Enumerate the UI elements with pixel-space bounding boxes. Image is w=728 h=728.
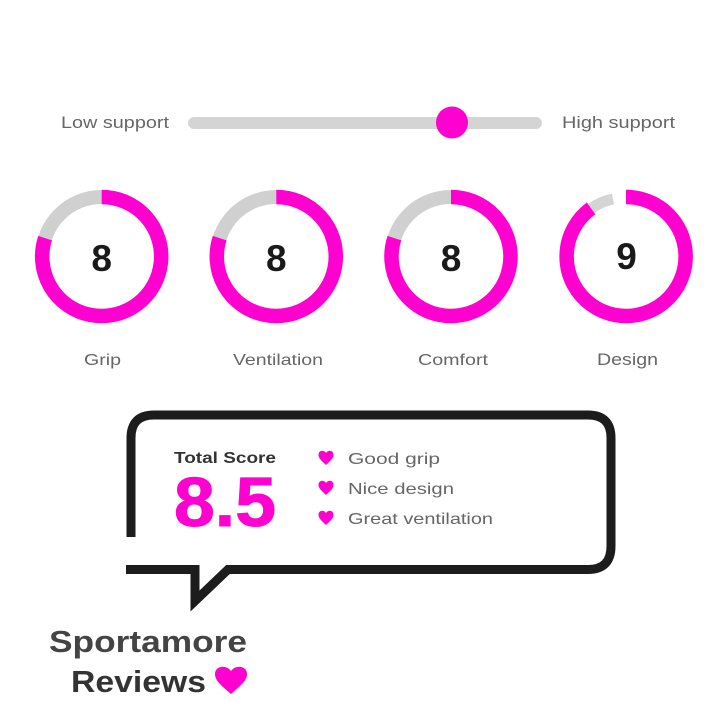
item: good grip: [318, 451, 440, 468]
ring: ventilation: Ventilation: [233, 352, 323, 369]
ring: design: Design: [597, 350, 658, 369]
slider track: [188, 117, 542, 129]
ring: grip: [42, 197, 161, 369]
brand: Sportamore Reviews: [49, 624, 247, 699]
ring: grip: Grip: [84, 352, 121, 369]
ring: design: [567, 197, 686, 369]
icon: heart: [215, 667, 247, 694]
label: high support: High support: [562, 113, 675, 132]
brand: Sportamore Reviews: Reviews: [71, 664, 206, 699]
item: nice design: Nice design: [348, 481, 454, 498]
ring: ventilation: 8: [266, 238, 287, 279]
slider knob: [436, 106, 468, 138]
item: great ventilation: Great ventilation: [348, 511, 493, 528]
brand: Sportamore Reviews: Sportamore: [49, 624, 247, 659]
ring: ventilation: [217, 197, 336, 369]
total score: [174, 450, 276, 541]
item: great ventilation: [318, 511, 493, 528]
total score value: 8.5: [174, 463, 276, 541]
label: low support: Low support: [61, 113, 169, 132]
support slider: [61, 106, 675, 138]
pros list: [318, 451, 493, 528]
ring: comfort: Comfort: [418, 352, 489, 369]
ring: comfort: 8: [441, 238, 461, 279]
total score label: Total Score: [174, 450, 276, 467]
ring: comfort: [391, 197, 510, 369]
speech bubble: [126, 415, 611, 601]
ring: grip: 8: [91, 238, 112, 279]
item: good grip: Good grip: [348, 451, 440, 468]
item: nice design: [318, 481, 454, 498]
ring: design: 9: [616, 236, 637, 277]
